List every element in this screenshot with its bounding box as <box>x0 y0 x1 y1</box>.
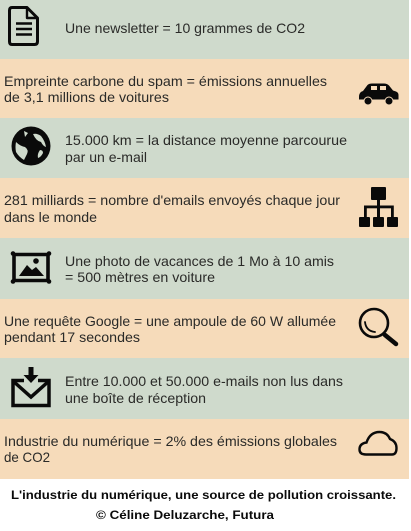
icon: globe <box>12 126 50 166</box>
icon: network hierarchy <box>359 187 398 227</box>
text: industry <box>4 433 337 465</box>
caption: © Céline Deluzarche, Futura <box>96 508 274 522</box>
row 1: newsletter <box>0 0 409 59</box>
row 7: unread e-mails <box>0 358 409 419</box>
text: spam <box>4 73 327 105</box>
text: unread: Entre 10.000 et 50.000 e-mails non lus dans <box>65 373 343 389</box>
text: distance: 15.000 km = la distance moyenne parcourue <box>65 132 347 148</box>
row 3: distance <box>0 118 409 178</box>
text: spam: Empreinte carbone du spam = émissions annuelles <box>4 73 327 89</box>
text: industry: Industrie du numérique = 2% des émissions globales <box>4 433 337 449</box>
icon: framed picture <box>11 251 51 284</box>
row 8: digital industry <box>0 419 409 479</box>
text: newsletter: Une newsletter = 10 grammes de CO2 <box>65 20 305 36</box>
text: distance: par un e-mail <box>65 149 147 165</box>
text: emails <box>4 192 340 225</box>
text: unread: une boîte de réception <box>65 390 206 406</box>
icon: cloud <box>360 432 396 454</box>
text: photo: = 500 mètres en voiture <box>65 269 215 285</box>
text: industry: de CO2 <box>4 449 50 465</box>
text: spam: de 3,1 millions de voitures <box>4 89 169 105</box>
icon: magnifying glass <box>360 309 396 344</box>
row 4: emails per day <box>0 178 409 238</box>
icon: document <box>10 8 38 44</box>
text: Google: pendant 17 secondes <box>4 329 140 345</box>
row 2: spam <box>0 59 409 118</box>
icon: inbox download <box>13 367 49 406</box>
text: unread <box>65 373 343 406</box>
text: photo <box>65 253 334 285</box>
row 5: photo <box>0 238 409 299</box>
text: Google: Une requête Google = une ampoule de 60 W allumée <box>4 313 336 329</box>
text: photo: Une photo de vacances de 1 Mo à 10 amis <box>65 253 334 269</box>
icon: car <box>359 84 398 105</box>
text: distance <box>65 132 347 165</box>
caption <box>11 488 396 522</box>
text: emails: 281 milliards = nombre d'emails envoyés chaque jour <box>4 192 340 208</box>
text: emails: dans le monde <box>4 209 97 225</box>
caption: L'industrie du numérique, une source de pollution croissante. <box>11 488 396 502</box>
text: Google <box>4 313 336 345</box>
row 6: Google request <box>0 299 409 358</box>
